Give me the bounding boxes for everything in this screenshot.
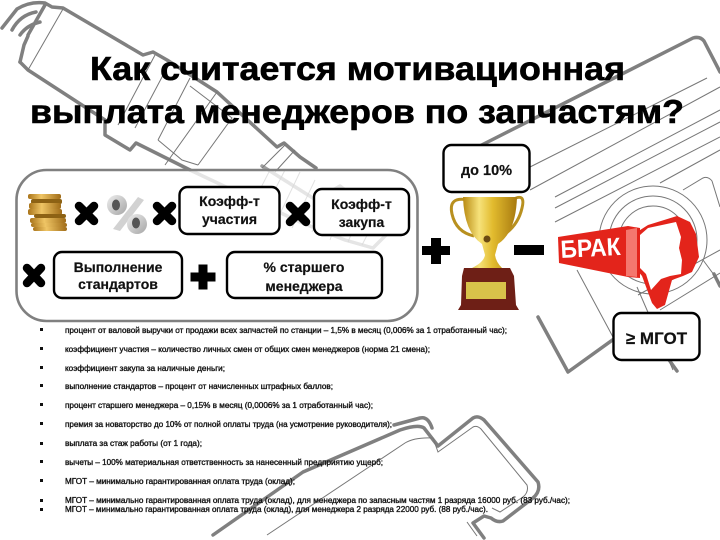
operator: minus xyxy=(514,245,544,255)
box: up to 10%: до 10% xyxy=(461,163,512,179)
box: participation coefficient: участия xyxy=(202,211,257,227)
icon: coins xyxy=(28,194,67,231)
box: purchase coefficient xyxy=(314,189,409,235)
bulleted notes: коэффициент закупа за наличные деньги; xyxy=(65,364,225,373)
bulleted notes: процент от валовой выручки от продажи всех запчастей по станции – 1,5% в месяц (0,006% за 1 отработанный час); xyxy=(65,326,507,335)
box: participation coefficient xyxy=(180,187,280,234)
box: participation coefficient: Коэфф-т xyxy=(199,193,260,209)
bulleted notes: МГОТ – минимально гарантированная оплата труда (оклад), для менеджера 2 разряда 22000 руб. (88 руб./час). xyxy=(65,505,488,514)
icon: red thumbs-down with word БРАК: БРАК xyxy=(560,233,622,264)
bulleted notes: выплата за стаж работы (от 1 года); xyxy=(65,439,202,448)
box: standards fulfilment xyxy=(54,252,182,298)
box: standards fulfilment: Выполнение xyxy=(74,259,163,275)
operator: plus xyxy=(422,238,450,264)
background: spark plug outline, right xyxy=(213,37,720,538)
title xyxy=(30,50,684,130)
operator: multiply xyxy=(290,206,306,222)
box: purchase coefficient: закупа xyxy=(339,214,385,230)
bulleted notes: МГОТ – минимально гарантированная оплата труда (оклад); xyxy=(65,477,295,486)
operator: multiply xyxy=(27,268,41,283)
title: Как считается мотивационная xyxy=(90,50,625,87)
box: standards fulfilment: стандартов xyxy=(78,276,158,292)
background: spark plug outline, upper left xyxy=(2,3,387,248)
box: at least minimum guaranteed pay xyxy=(614,313,700,360)
bulleted notes: премия за новаторство до 10% от полной оплаты труда (на усмотрение руководителя); xyxy=(65,420,392,429)
bulleted notes: коэффициент участия – количество личных смен от общих смен менеджеров (норма 21 смена); xyxy=(65,345,430,354)
bulleted notes: выполнение стандартов – процент от начисленных штрафных баллов; xyxy=(65,382,333,391)
operator: multiply xyxy=(79,206,94,221)
bulleted notes xyxy=(40,326,570,514)
panel: formula xyxy=(16,170,418,321)
operator: plus xyxy=(191,265,215,289)
icon: red thumbs-down with word БРАК xyxy=(558,216,699,309)
bulleted notes: МГОТ – минимально гарантированная оплата труда (оклад), для менеджера по запасным частям 1 разряда 16000 руб. (83 руб./час); xyxy=(65,496,570,505)
bulleted notes: вычеты – 100% материальная ответственность за нанесенный предприятию ущерб; xyxy=(65,458,383,467)
icon: percent sign xyxy=(107,195,147,234)
icon: trophy xyxy=(451,197,523,310)
box: senior manager percent: менеджера xyxy=(265,278,343,294)
box: at least minimum guaranteed pay: ≥ МГОТ xyxy=(626,329,688,348)
box: senior manager percent: % старшего xyxy=(264,259,344,275)
operator: multiply xyxy=(157,206,172,221)
bulleted notes: процент старшего менеджера – 0,15% в месяц (0,0006% за 1 отработанный час); xyxy=(65,401,373,410)
title: выплата менеджеров по запчастям? xyxy=(30,93,684,130)
box: up to 10% xyxy=(444,145,530,192)
box: purchase coefficient: Коэфф-т xyxy=(331,196,392,212)
box: senior manager percent xyxy=(227,252,382,298)
